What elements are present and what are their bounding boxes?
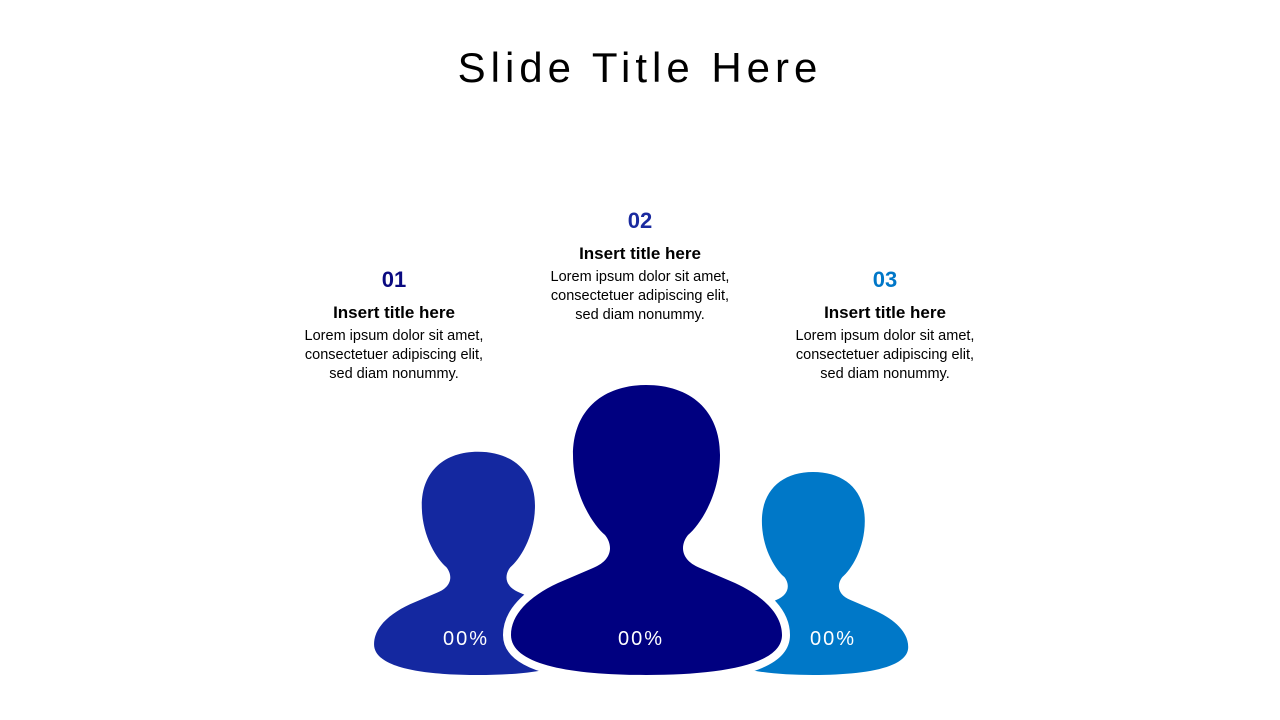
text block 03: Insert title here — [824, 303, 946, 322]
text block 02 — [551, 208, 729, 323]
figure 03 — [718, 472, 908, 675]
figure 03: 00% — [810, 628, 856, 650]
figure 02: 00% — [618, 628, 664, 650]
text block 01: Lorem ipsum dolor sit amet, — [305, 328, 483, 344]
text block 01: Insert title here — [333, 303, 455, 322]
text block 02: Lorem ipsum dolor sit amet, — [551, 269, 729, 285]
text block 03: sed diam nonummy. — [820, 366, 950, 382]
text block 02: 02 — [628, 208, 652, 233]
text block 02: consectetuer adipiscing elit, — [551, 288, 729, 304]
text block 02: Insert title here — [579, 244, 701, 263]
figure 01: 00% — [443, 628, 489, 650]
title: Slide Title Here — [458, 44, 822, 91]
text block 01: consectetuer adipiscing elit, — [305, 347, 483, 363]
text block 03 — [796, 267, 974, 382]
text block 01: sed diam nonummy. — [329, 366, 459, 382]
figure 02 — [511, 385, 782, 675]
text block 01: 01 — [382, 267, 406, 292]
text block 03: consectetuer adipiscing elit, — [796, 347, 974, 363]
text block 03: Lorem ipsum dolor sit amet, — [796, 328, 974, 344]
text block 01 — [305, 267, 483, 382]
text block 02: sed diam nonummy. — [575, 307, 705, 323]
text block 03: 03 — [873, 267, 897, 292]
figure 01 — [374, 452, 583, 675]
